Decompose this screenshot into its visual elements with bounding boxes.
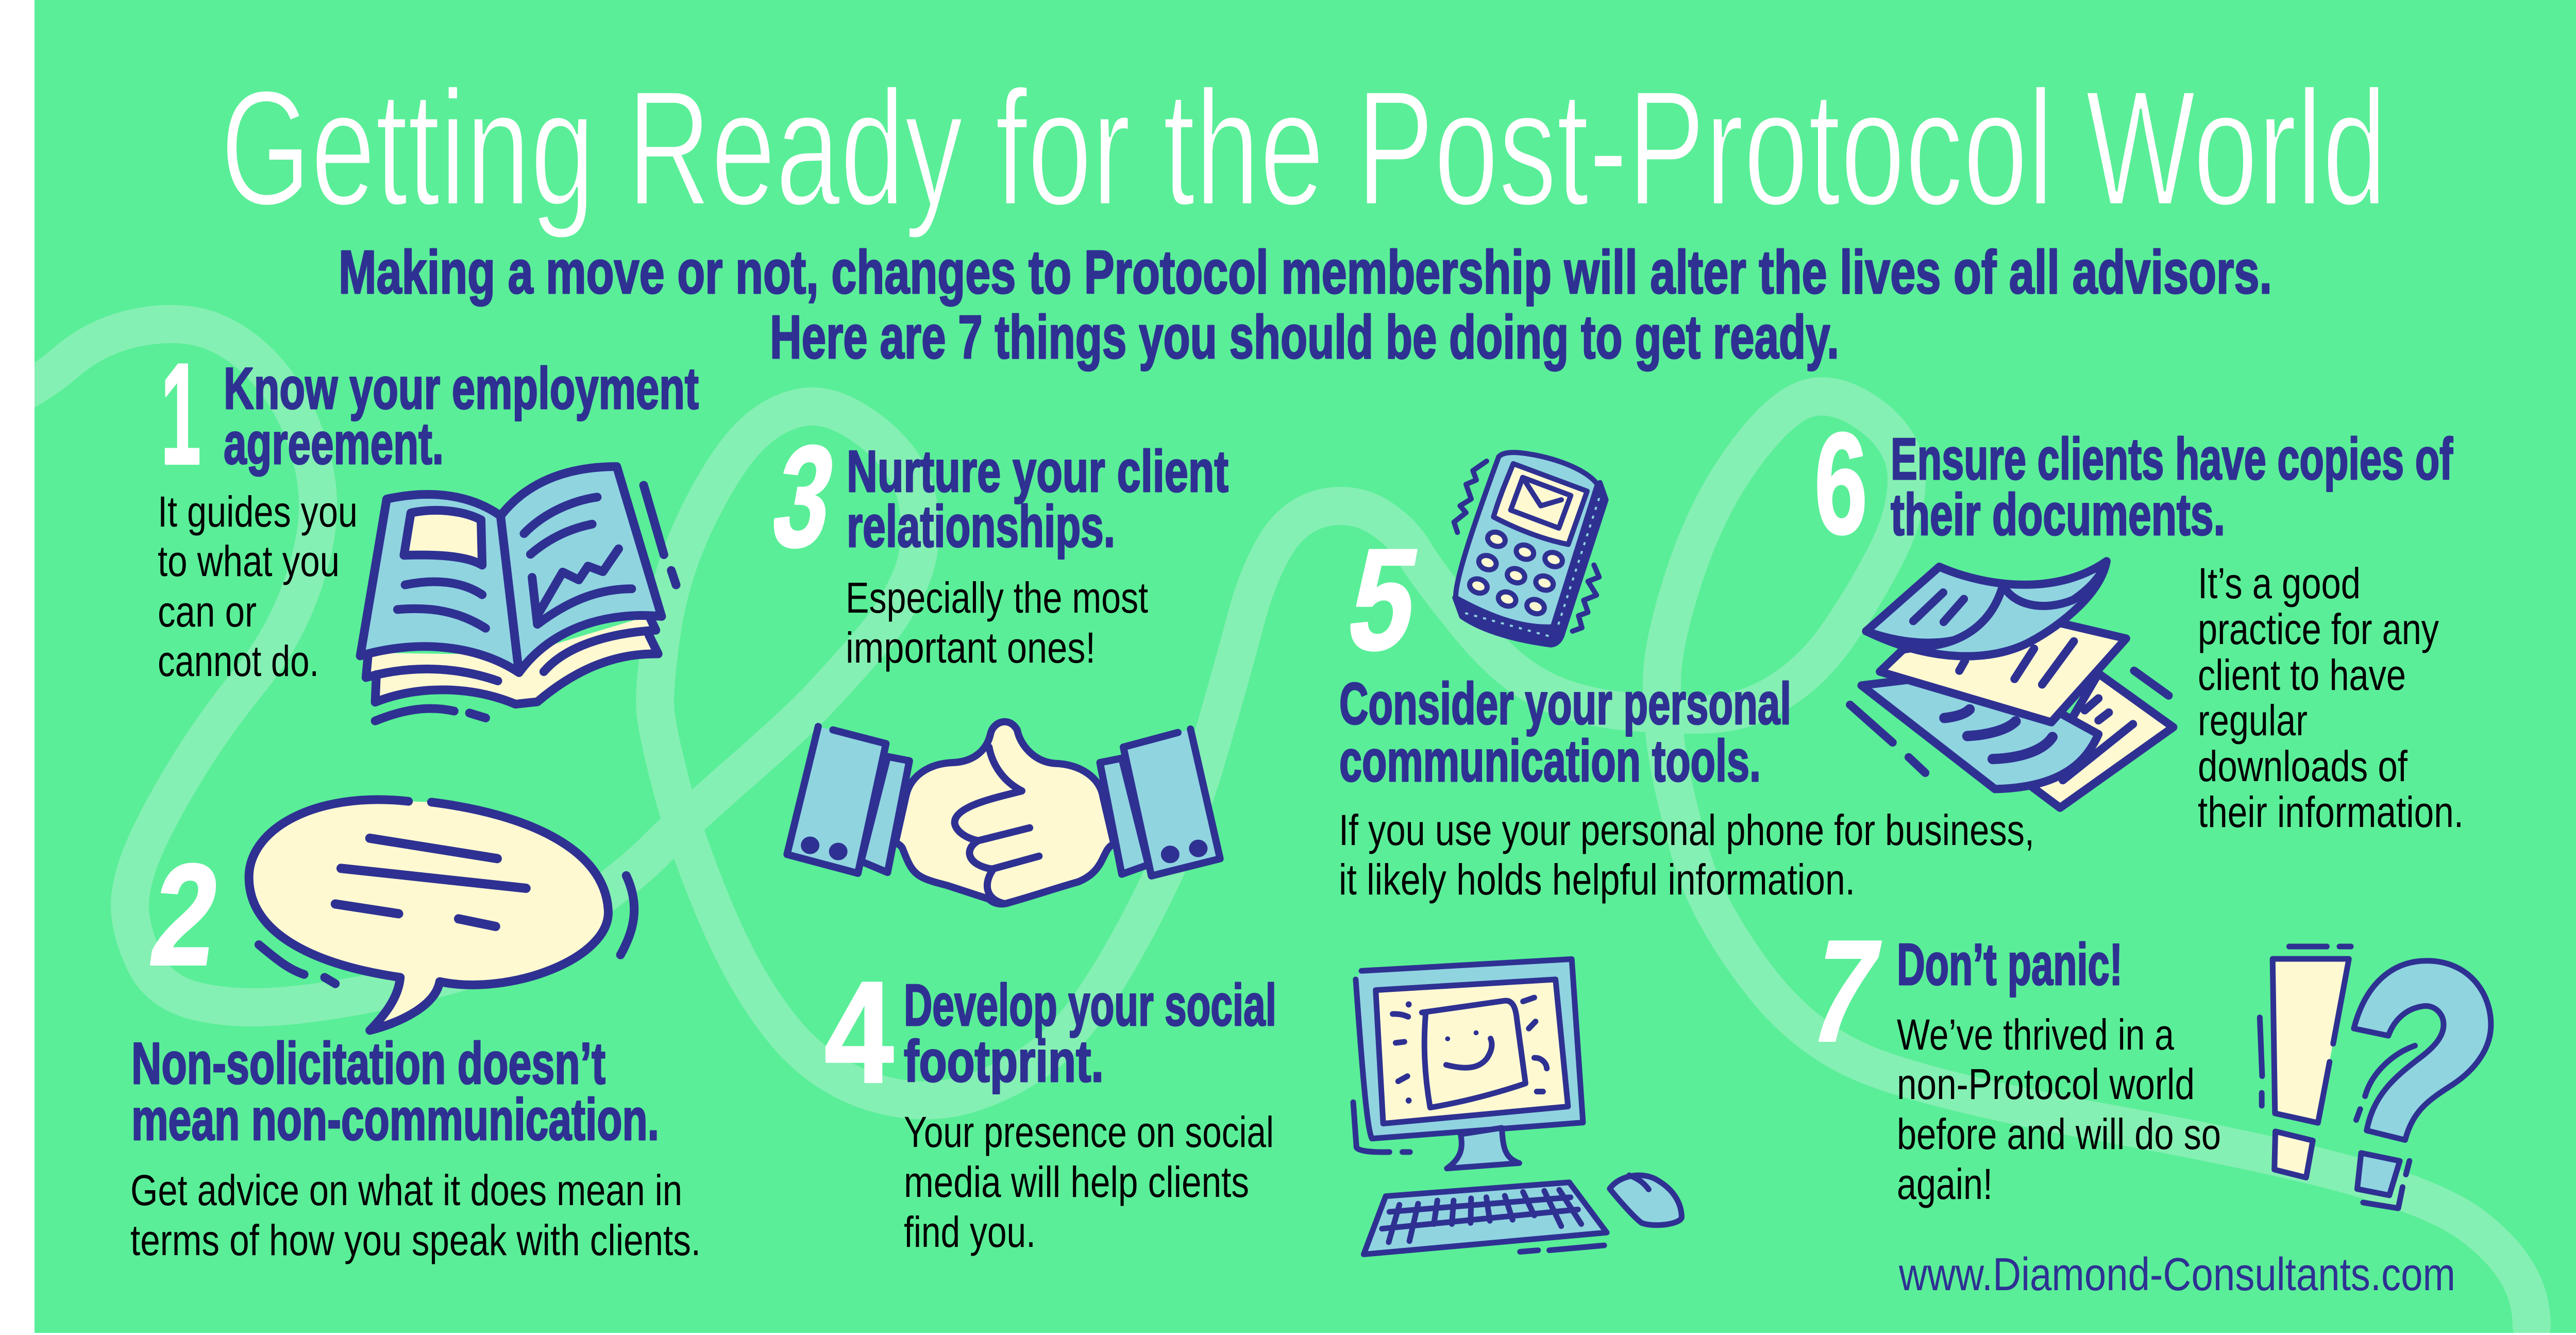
icon: documents xyxy=(1850,561,2173,808)
body text 2 xyxy=(130,1166,701,1264)
heading 5: communication tools. xyxy=(1339,729,1761,794)
panel: step 5 xyxy=(1338,452,2034,1254)
panel: step 6 xyxy=(1814,403,2464,836)
icon: exclamation and question marks xyxy=(2260,947,2491,1208)
heading 1: Know your employment xyxy=(224,356,699,421)
body text 5 xyxy=(1339,806,2034,904)
body text 3: important ones! xyxy=(846,623,1096,672)
number 4: 4 xyxy=(824,952,895,1113)
decorative ribbon xyxy=(0,324,2532,1327)
panel: step 7 xyxy=(1797,911,2491,1208)
body text 3: Especially the most xyxy=(846,573,1148,622)
website url: www.Diamond-Consultants.com xyxy=(1898,1249,2455,1300)
body text 3 xyxy=(846,573,1148,672)
panel: step 1 xyxy=(158,334,699,721)
body text 6 xyxy=(2198,559,2464,836)
body text 2: Get advice on what it does mean in xyxy=(130,1166,682,1214)
heading 2: Non-solicitation doesn’t xyxy=(131,1031,605,1096)
body text 5: If you use your personal phone for business, xyxy=(1339,806,2034,854)
body text 2: terms of how you speak with clients. xyxy=(130,1216,701,1264)
body text 6: It’s a good xyxy=(2198,559,2361,607)
heading 1: agreement. xyxy=(224,411,444,477)
number 5: 5 xyxy=(1338,519,1430,680)
subtitle: Here are 7 things you should be doing to get ready. xyxy=(770,303,1839,371)
heading 3 xyxy=(847,439,1228,560)
heading 1 xyxy=(224,356,699,477)
panel: step 2 xyxy=(130,800,701,1264)
heading 6 xyxy=(1891,427,2453,548)
body text 4: media will help clients xyxy=(904,1158,1249,1206)
number 2: 2 xyxy=(143,834,229,995)
heading 3: Nurture your client xyxy=(847,439,1228,504)
number 3: 3 xyxy=(763,416,846,577)
body text 1 xyxy=(158,487,358,685)
number 1: 1 xyxy=(161,334,201,495)
body text 6: practice for any xyxy=(2198,605,2439,653)
body text 6: regular xyxy=(2198,696,2308,745)
body text 7: We’ve thrived in a xyxy=(1897,1010,2174,1059)
body text 4: find you. xyxy=(904,1208,1036,1256)
body text 5: it likely holds helpful information. xyxy=(1339,855,1855,904)
icon: speech bubble xyxy=(249,800,634,1030)
heading 2: mean non-communication. xyxy=(131,1087,659,1153)
heading 4 xyxy=(904,973,1276,1094)
body text 6: client to have xyxy=(2198,651,2406,699)
icon: desktop computer xyxy=(1353,959,1681,1254)
body text 1: can or xyxy=(158,587,257,636)
body text 7: non-Protocol world xyxy=(1897,1060,2195,1108)
heading 2 xyxy=(131,1031,659,1153)
body text 7: before and will do so xyxy=(1897,1110,2221,1158)
subtitle xyxy=(339,238,2272,371)
heading 3: relationships. xyxy=(847,494,1115,560)
panel: step 3 xyxy=(763,416,1228,904)
heading 6: their documents. xyxy=(1891,482,2225,548)
icon: open book xyxy=(360,466,676,721)
body text 4 xyxy=(904,1108,1274,1256)
heading 4: footprint. xyxy=(904,1029,1104,1094)
body text 7 xyxy=(1897,1010,2221,1208)
body text 7: again! xyxy=(1897,1160,1993,1208)
panel: step 4 xyxy=(824,952,1276,1256)
icon: mobile phone xyxy=(1454,452,1606,645)
number 6: 6 xyxy=(1814,403,1867,564)
heading 5 xyxy=(1339,671,1791,794)
icon: handshake xyxy=(787,722,1220,904)
body text 1: to what you xyxy=(158,537,340,585)
number 7: 7 xyxy=(1797,911,1893,1072)
heading 5: Consider your personal xyxy=(1339,671,1791,737)
body text 6: downloads of xyxy=(2198,742,2408,790)
heading 4: Develop your social xyxy=(904,973,1276,1038)
body text 4: Your presence on social xyxy=(904,1108,1274,1156)
heading 7: Don’t panic! xyxy=(1897,932,2123,998)
body text 1: cannot do. xyxy=(158,637,319,685)
body text 6: their information. xyxy=(2198,788,2464,836)
body text 1: It guides you xyxy=(158,487,358,536)
